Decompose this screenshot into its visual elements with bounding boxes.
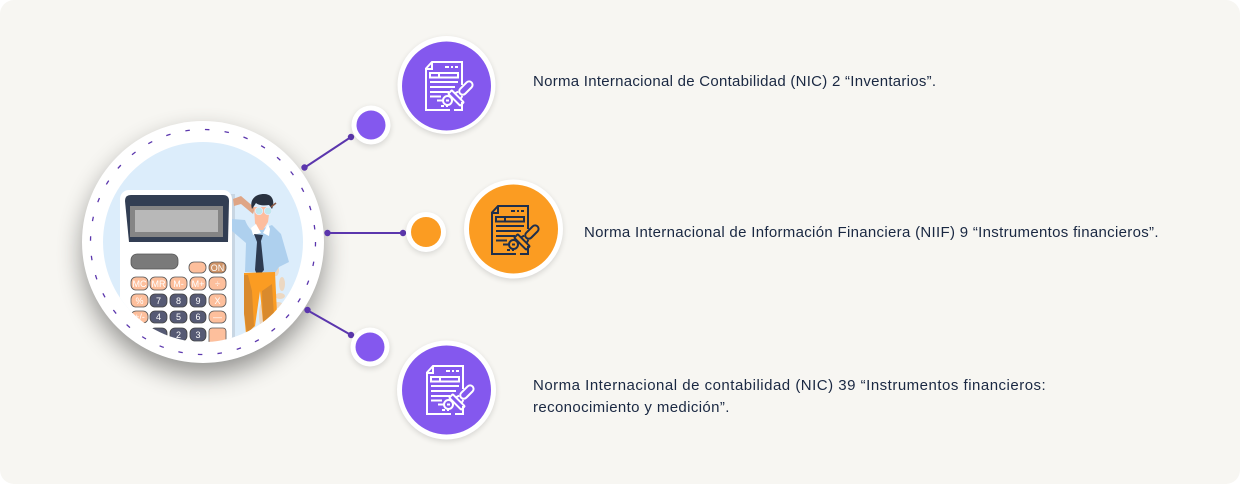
text: NIC 2: Norma Internacional de Contabilidad (NIC) 2 “Inventarios”.: [533, 73, 936, 90]
icon: calculator: +/-: [134, 312, 145, 322]
icon: calculator: [120, 190, 235, 342]
text: NIIF 9: Norma Internacional de Información Financiera (NIIF) 9 “Instrumentos financieros”.: [584, 224, 1159, 241]
connector: top: [301, 134, 354, 171]
node: bottom purple dot: [350, 328, 390, 369]
icon: calculator: 2: [176, 330, 181, 340]
text: NIC 39: Norma Internacional de contabilidad (NIC) 39 “Instrumentos financieros:: [533, 377, 1046, 394]
text: NIC 39: [533, 377, 1046, 416]
icon: calculator: —: [213, 312, 222, 322]
illustration: calculator and man in circle: [82, 121, 324, 380]
icon: purple document badge bottom: [397, 340, 496, 442]
icon: calculator: X: [214, 296, 221, 306]
main circle shadow: [83, 134, 323, 374]
icon: calculator: MR: [152, 279, 166, 289]
icon: calculator: 9: [195, 296, 201, 306]
icon: calculator: M+: [192, 279, 204, 289]
icon: calculator: 3: [195, 330, 201, 340]
icon: calculator: ON: [211, 263, 224, 273]
icon: orange document badge middle: [464, 180, 563, 280]
icon: purple document badge top: [398, 36, 496, 136]
icon: calculator: 5: [176, 312, 181, 322]
icon: man: [232, 194, 289, 334]
icon: calculator: ÷: [215, 279, 220, 289]
icon: calculator: MC: [132, 279, 147, 289]
text: NIC 39: reconocimiento y medición”.: [533, 399, 730, 416]
connector: bottom: [304, 307, 354, 338]
icon: calculator: 4: [156, 312, 161, 322]
icon: calculator: %: [135, 296, 144, 306]
icon: calculator: M-: [173, 279, 184, 289]
connector: middle: [324, 230, 406, 236]
icon: calculator: 7: [156, 296, 161, 306]
node: top purple dot: [351, 106, 391, 147]
icon: calculator: 6: [195, 312, 201, 322]
icon: calculator: 8: [176, 296, 181, 306]
node: middle orange dot: [406, 212, 446, 254]
